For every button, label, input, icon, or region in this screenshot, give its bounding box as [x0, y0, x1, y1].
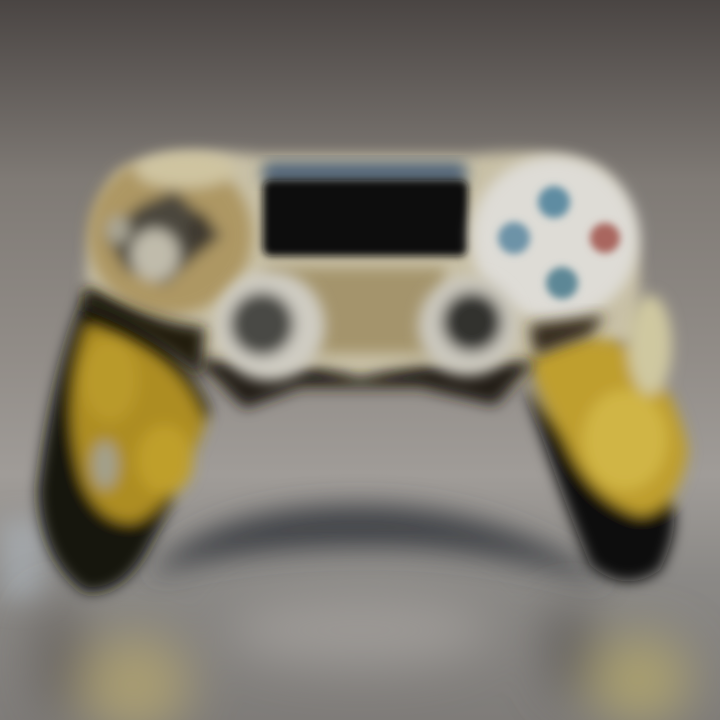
button right: red	[590, 223, 620, 253]
left thumbstick	[215, 271, 325, 381]
controller body	[85, 152, 640, 385]
controller	[38, 152, 688, 592]
button top: blue	[538, 186, 570, 218]
touchpad black surface	[263, 180, 468, 256]
left d-pad panel	[88, 152, 252, 315]
right thumbstick	[418, 276, 518, 376]
dark shadow below left dpad	[85, 285, 205, 375]
dark shadow below right buttons	[530, 315, 605, 355]
left grip: yellow	[38, 295, 210, 592]
button left: blue	[498, 222, 530, 254]
touchpad blue top edge	[262, 162, 467, 184]
floor shadow	[0, 505, 610, 600]
white panel	[471, 156, 639, 320]
floor reflection	[35, 595, 690, 720]
center lower panel	[195, 268, 535, 408]
face button panel	[471, 156, 639, 320]
right grip: yellow	[525, 295, 688, 581]
center touchpad	[262, 162, 468, 256]
button bottom: teal	[546, 267, 578, 299]
